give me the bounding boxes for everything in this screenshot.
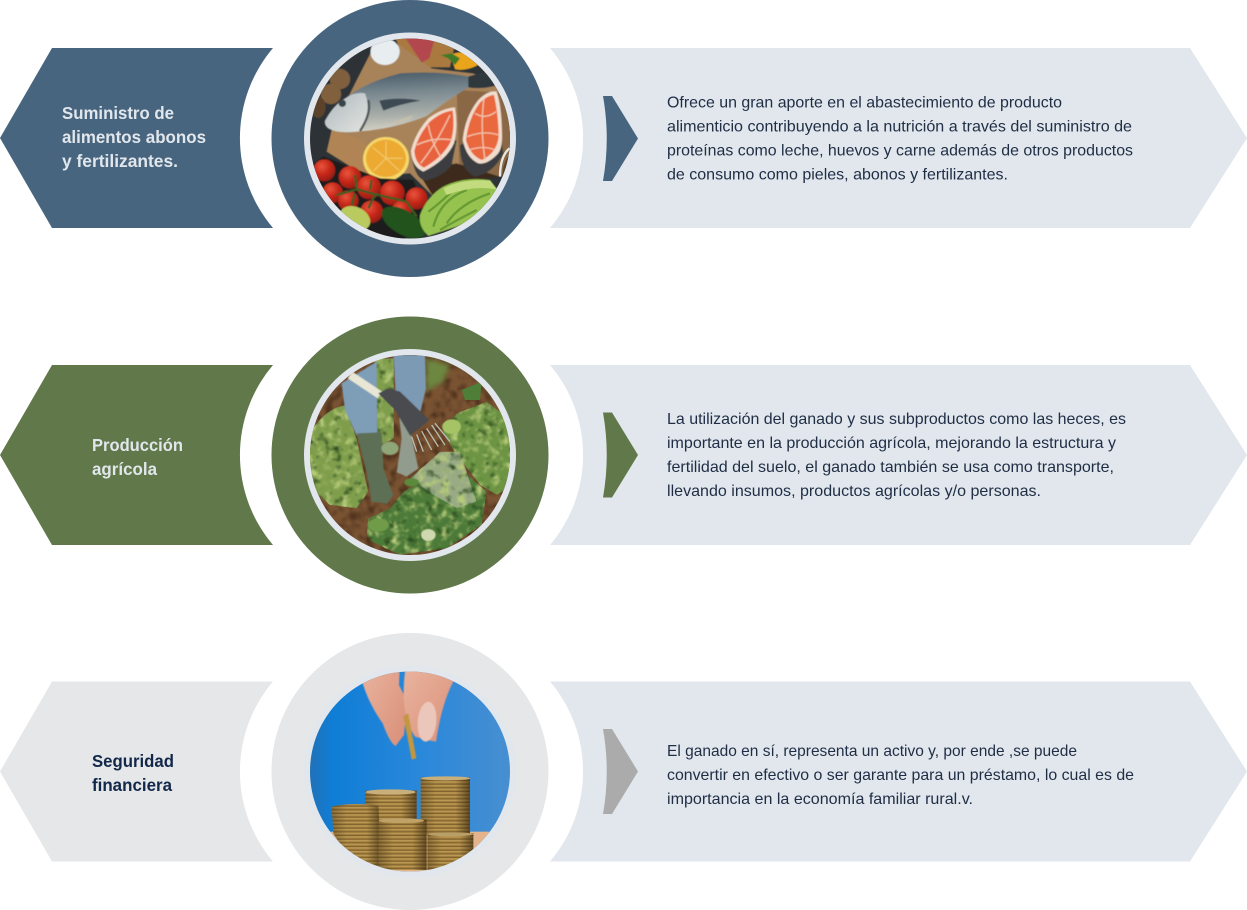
right panel: food supply description: de consumo como pieles, abonos y fertilizantes. [667,167,1008,184]
coin stacks [332,776,473,870]
right panel: agricultural production description: importante en la producción agrícola, mejorando la estructura y [667,435,1116,452]
left banner: food supply: Suministro de [62,103,174,123]
right panel: agricultural production description: fertilidad del suelo, el ganado también se usa como transporte, [667,459,1114,476]
row 1: food supply [0,0,1247,277]
right panel: financial security description: importancia en la economía familiar rural.v. [667,791,973,808]
left banner: food supply: alimentos abonos [62,127,206,147]
left banner: agricultural production: Producción [92,435,183,455]
left banner: agricultural production: agrícola [92,459,157,479]
circle medallion: food photo [272,0,548,277]
right panel: food supply description: proteínas como leche, huevos y carne además de otros productos [667,143,1133,160]
right panel: financial security description [550,682,1247,862]
right panel: agricultural production description [550,365,1247,545]
right panel: food supply description [550,48,1247,228]
left banner: financial security: financiera [92,775,172,795]
right panel: agricultural production description: La utilización del ganado y sus subproductos como las heces, es [667,411,1126,428]
left banner: financial security: Seguridad [92,751,174,771]
left banner: financial security [0,682,273,862]
left banner: agricultural production [0,365,273,545]
right panel: financial security description: convertir en efectivo o ser garante para un préstamo, lo cual es de [667,767,1134,784]
arrow icon [603,729,638,814]
row 2: agricultural production [0,316,1247,594]
left banner: food supply [0,48,273,228]
right panel: food supply description: Ofrece un gran aporte en el abastecimiento de producto [667,95,1062,112]
circle medallion: watering plants photo [272,316,548,594]
right panel: food supply description: alimenticio contribuyendo a la nutrición a través del suministro de [667,119,1132,136]
arrow icon [603,412,638,498]
right panel: agricultural production description: llevando insumos, productos agrícolas y/o personas. [667,483,1041,500]
right panel: financial security description: El ganado en sí, representa un activo y, por ende ,se puede [667,743,1077,760]
circle medallion: coins photo [272,633,548,910]
arrow icon [603,96,638,181]
left banner: food supply: y fertilizantes. [62,151,178,171]
row 3: financial security [0,633,1247,910]
